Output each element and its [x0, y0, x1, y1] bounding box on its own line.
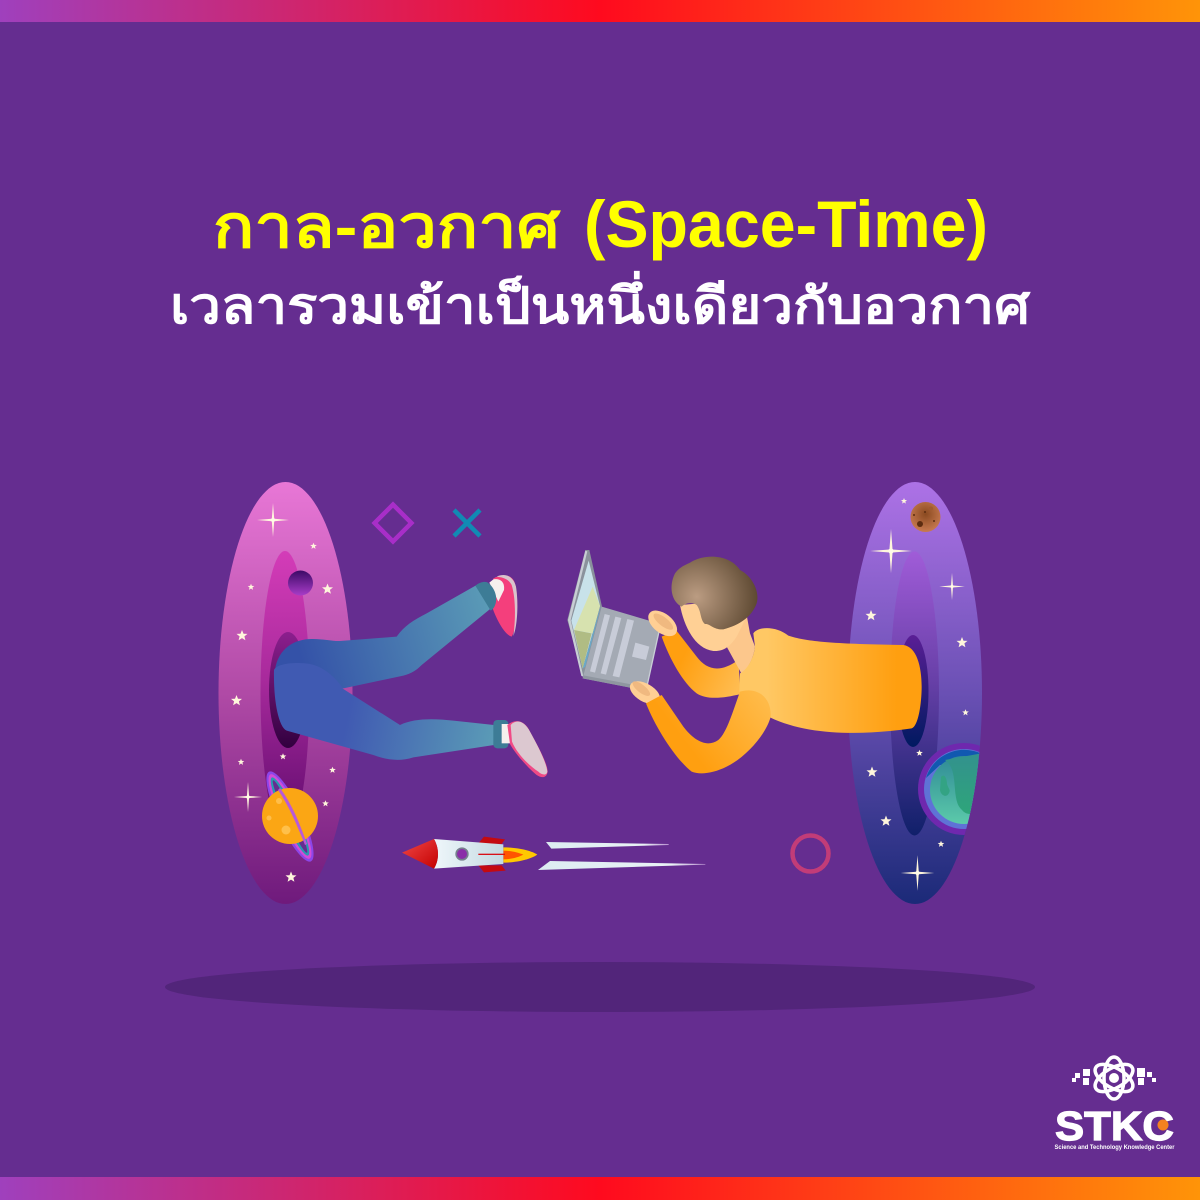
hands	[626, 605, 682, 709]
icon: blue cross	[454, 510, 480, 536]
lower leg	[274, 663, 494, 760]
icon: small purple moon	[288, 570, 313, 596]
logo tagline: Science and Technology Knowledge Center	[1054, 1144, 1175, 1151]
icon: brown asteroid	[910, 502, 940, 532]
lower shoe	[493, 720, 548, 777]
figure: legs emerging from left portal	[274, 575, 548, 777]
figure: person with laptop	[567, 550, 922, 773]
neck	[727, 615, 755, 674]
subtitle: เวลารวมเข้าเป็นหนึ่งเดียวกับอวกาศ	[170, 271, 1031, 334]
right blue portal	[848, 482, 982, 904]
icon: rocket	[402, 837, 705, 872]
icon: pink ring	[792, 836, 828, 872]
torso	[739, 628, 922, 733]
ground shadow	[165, 962, 1035, 1012]
back arm	[662, 630, 741, 698]
logo: STKC	[1054, 1057, 1175, 1151]
bottom gradient bar	[0, 1177, 1200, 1200]
icon: purple diamond	[375, 505, 411, 541]
title: กาล-อวกาศ	[213, 194, 562, 260]
logo orange dot	[1158, 1120, 1168, 1130]
front arm	[646, 690, 771, 773]
title	[213, 187, 988, 261]
face	[680, 603, 747, 651]
laptop	[567, 550, 661, 691]
left pink portal	[218, 482, 352, 904]
icon: ringed orange planet	[258, 767, 322, 866]
top gradient bar	[0, 0, 1200, 22]
logo wordmark: STKC	[1055, 1103, 1174, 1149]
upper shoe	[475, 575, 517, 637]
title: (Space-Time)	[584, 187, 988, 261]
logo atom mark	[1072, 1057, 1156, 1099]
icon: green planet	[918, 743, 980, 835]
hair	[672, 557, 758, 629]
upper leg	[275, 585, 495, 688]
